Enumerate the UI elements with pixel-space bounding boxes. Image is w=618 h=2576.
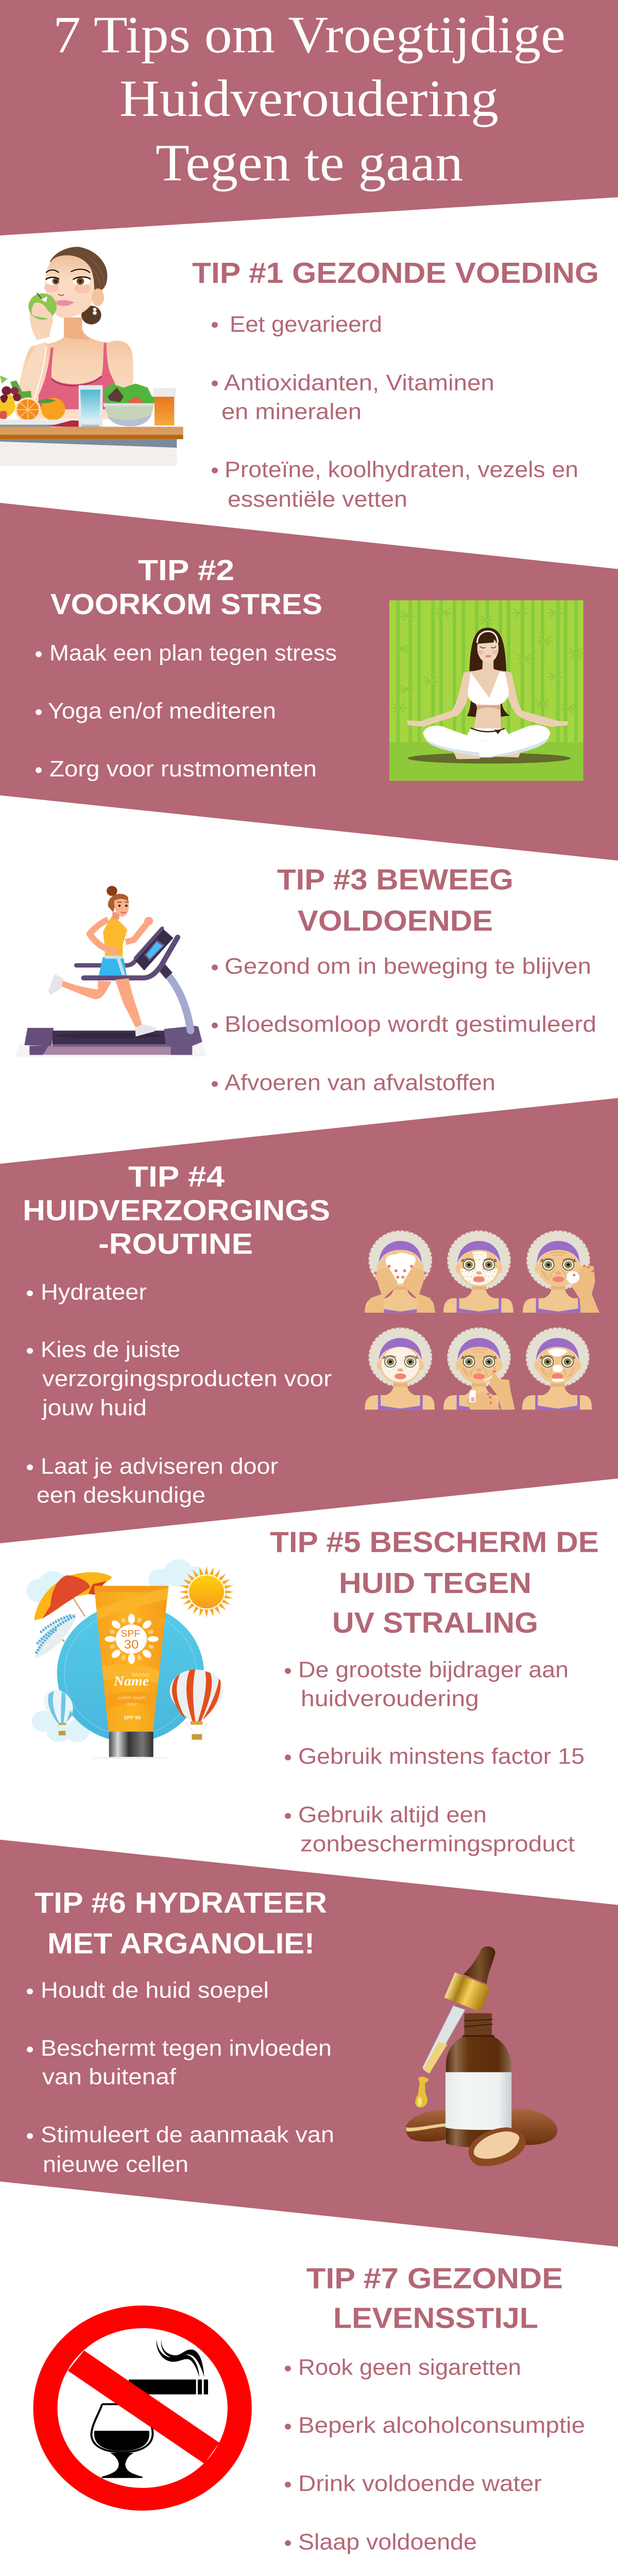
bullet list: tip 6: Houdt de huid soepel xyxy=(41,1978,269,2003)
panel: tip 4 skincare routine xyxy=(0,1098,618,1543)
bullet list: tip 7 xyxy=(285,2355,585,2554)
heading: tip 5: HUID TEGEN xyxy=(339,1567,531,1600)
title: Huidveroudering xyxy=(119,70,499,127)
icon: six skincare steps xyxy=(365,1232,599,1410)
bullet list: tip 5: Gebruik altijd een xyxy=(298,1803,487,1827)
bullet list: tip 3 xyxy=(212,954,596,1095)
icon: sunscreen tube with sun umbrellas and balloons: dolor xyxy=(127,1702,137,1706)
panel: tip 1 healthy food xyxy=(0,247,599,512)
bullet list: tip 1: Eet gevarieerd xyxy=(230,312,382,336)
bullet list: tip 1 xyxy=(212,312,578,512)
bullet list: tip 5: De grootste bijdrager aan xyxy=(298,1658,569,1682)
icon: sunscreen tube with sun umbrellas and balloons: SPF xyxy=(121,1629,140,1639)
bullet list: tip 2: Maak een plan tegen stress xyxy=(49,641,337,666)
bullet list: tip 4: Laat je adviseren door xyxy=(41,1454,278,1479)
heading: tip 2: TIP #2 xyxy=(138,554,234,587)
icon: woman meditating on bamboo background xyxy=(389,600,583,781)
icon: step 2 scrub mask xyxy=(443,1232,513,1313)
bullet list: tip 7: Rook geen sigaretten xyxy=(298,2355,521,2380)
bullet list: tip 4 xyxy=(27,1280,332,1507)
heading: tip 3: TIP #3 BEWEEG xyxy=(277,863,513,896)
bullet list: tip 7: Slaap voldoende xyxy=(298,2530,477,2554)
heading: tip 6: MET ARGANOLIE! xyxy=(47,1927,315,1960)
heading: tip 7 xyxy=(306,2262,563,2334)
heading: tip 5: UV STRALING xyxy=(332,1607,538,1639)
heading: tip 7: LEVENSSTIJL xyxy=(333,2302,538,2334)
icon: sunscreen tube with sun umbrellas and balloons: Lorem ipsum xyxy=(118,1695,146,1700)
panel: tip 7 healthy lifestyle xyxy=(45,2262,585,2554)
icon: step 3 cotton pad xyxy=(523,1232,599,1313)
icon: woman running on treadmill xyxy=(14,886,207,1057)
heading: tip 4: TIP #4 xyxy=(128,1161,225,1193)
bullet list: tip 2: Zorg voor rustmomenten xyxy=(49,757,317,782)
icon: sunscreen tube with sun umbrellas and balloons: 30 xyxy=(124,1638,139,1652)
bullet list: tip 7: Beperk alcoholconsumptie xyxy=(298,2413,585,2438)
bullet list: tip 3: Gezond om in beweging te blijven xyxy=(225,954,591,979)
heading: tip 6: TIP #6 HYDRATEER xyxy=(35,1887,327,1919)
icon: sunscreen tube with sun umbrellas and balloons: SPF 50 xyxy=(124,1715,141,1721)
icon: woman eating apple with healthy food xyxy=(0,247,183,466)
bullet list: tip 6: Beschermt tegen invloeden xyxy=(41,2036,332,2061)
heading: tip 1: TIP #1 GEZONDE VOEDING xyxy=(192,257,599,290)
panel: title banner xyxy=(0,0,618,235)
bullet list: tip 4: jouw huid xyxy=(41,1396,147,1420)
heading: tip 2 xyxy=(50,554,322,620)
bullet list: tip 5: zonbeschermingsproduct xyxy=(300,1832,575,1856)
bullet list: tip 4: een deskundige xyxy=(37,1483,205,1507)
heading: tip 7: TIP #7 GEZONDE xyxy=(306,2262,563,2295)
icon: argan oil dropper bottle with nuts xyxy=(406,1946,557,2166)
heading: tip 4: HUIDVERZORGINGS xyxy=(23,1194,330,1227)
bullet list: tip 6 xyxy=(27,1978,334,2177)
bullet list: tip 7: Drink voldoende water xyxy=(298,2471,542,2496)
heading: tip 5 xyxy=(270,1526,599,1639)
panel: tip 3 exercise xyxy=(14,863,596,1095)
bullet list: tip 3: Afvoeren van afvalstoffen xyxy=(225,1071,495,1095)
heading: tip 3 xyxy=(277,863,513,937)
bullet list: tip 4: Hydrateer xyxy=(41,1280,147,1304)
icon: step 1 foam cleansing xyxy=(365,1232,436,1313)
bullet list: tip 6: van buitenaf xyxy=(42,2065,177,2089)
title: Tegen te gaan xyxy=(156,134,463,192)
bullet list: tip 6: Stimuleert de aanmaak van xyxy=(41,2123,334,2147)
bullet list: tip 4: Kies de juiste xyxy=(41,1337,180,1362)
icon: step 4 cream mask xyxy=(365,1329,435,1410)
bullet list: tip 1: Antioxidanten, Vitaminen xyxy=(224,371,494,395)
icon: sunscreen tube with sun umbrellas and balloons: Name xyxy=(113,1673,149,1688)
bullet list: tip 1: essentiële vetten xyxy=(228,487,407,512)
icon: no smoking no alcohol sign xyxy=(45,2317,239,2499)
icon: step 6 patches xyxy=(522,1329,592,1410)
heading: tip 6 xyxy=(35,1887,327,1960)
title: 7 Tips om Vroegtijdige xyxy=(53,6,565,64)
bullet list: tip 1: en mineralen xyxy=(221,400,362,424)
bullet list: tip 5 xyxy=(285,1658,585,1856)
bullet list: tip 5: huidveroudering xyxy=(301,1687,479,1711)
panel: tip 5 UV protection xyxy=(27,1526,599,1856)
bullet list: tip 3: Bloedsomloop wordt gestimuleerd xyxy=(225,1012,596,1037)
icon: sunscreen tube with sun umbrellas and balloons: BRAND xyxy=(132,1672,150,1678)
heading: tip 3: VOLDOENDE xyxy=(298,905,493,937)
bullet list: tip 1: Proteïne, koolhydraten, vezels en xyxy=(225,457,578,482)
bullet list: tip 6: nieuwe cellen xyxy=(43,2153,188,2177)
heading: tip 4 xyxy=(23,1161,330,1260)
title xyxy=(53,6,565,192)
heading: tip 5: TIP #5 BESCHERM DE xyxy=(270,1526,599,1558)
heading: tip 2: VOORKOM STRES xyxy=(50,588,322,620)
panel: tip 6 argan oil xyxy=(0,1840,618,2247)
bullet list: tip 4: verzorgingsproducten voor xyxy=(42,1367,332,1391)
bullet list: tip 2: Yoga en/of mediteren xyxy=(48,699,276,723)
heading: tip 4: -ROUTINE xyxy=(98,1228,253,1260)
bullet list: tip 2 xyxy=(36,641,337,782)
icon: step 5 applying serum xyxy=(443,1329,515,1410)
bullet list: tip 5: Gebruik minstens factor 15 xyxy=(298,1744,585,1769)
icon: sunscreen tube with sun umbrellas and balloons xyxy=(27,1555,245,1759)
panel: tip 2 stress xyxy=(0,503,618,860)
